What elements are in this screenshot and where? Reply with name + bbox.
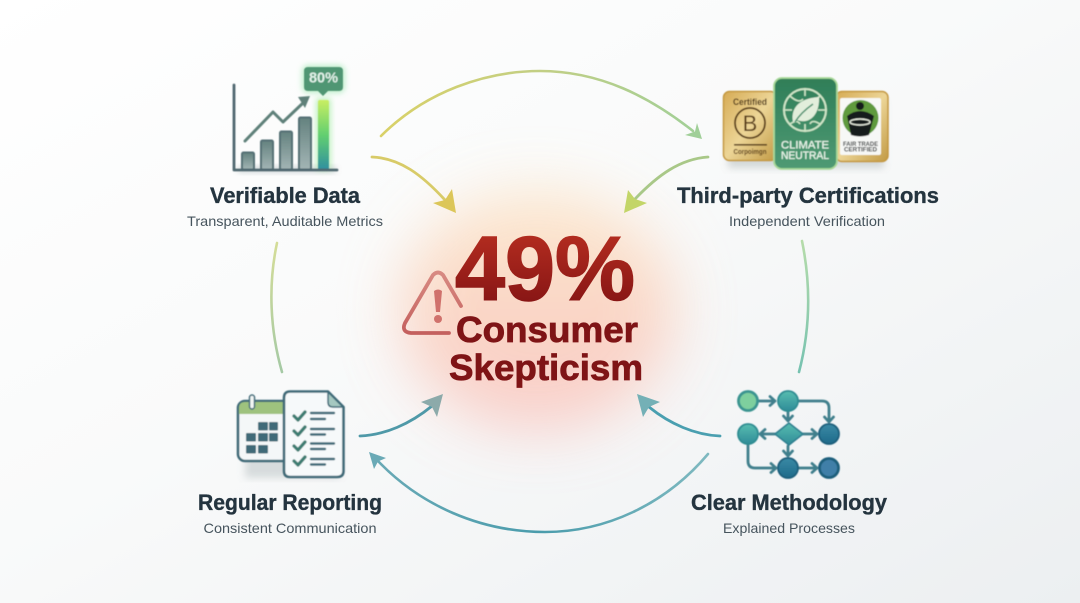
heading: Regular Reporting (198, 490, 382, 515)
icon: process flowchart (738, 391, 839, 478)
arrow: data to center (372, 157, 456, 213)
badge: climate neutral: NEUTRAL (781, 150, 829, 162)
icon: warning triangle (404, 272, 461, 333)
arrow: reporting to center (360, 394, 443, 436)
badge: B Corp: B (743, 111, 757, 136)
heading: Verifiable Data (210, 183, 361, 208)
arrow: methodology to center (637, 394, 720, 436)
panel: clear methodology (691, 391, 888, 536)
central red glow (399, 190, 675, 430)
badge: B Corp (724, 92, 776, 160)
panel: regular reporting (198, 392, 382, 536)
badge: climate neutral (774, 78, 837, 169)
subtext: Explained Processes (723, 520, 855, 536)
calendar (238, 395, 290, 461)
panel: verifiable data (187, 65, 383, 229)
badge: fair trade: FAIR TRADE (843, 141, 879, 148)
subtext: Independent Verification (729, 213, 885, 229)
heading: Third-party Certifications (677, 183, 939, 208)
icon: calendar and checklist (238, 392, 344, 478)
icon: certification badges (724, 78, 888, 169)
big number: 49% (455, 219, 635, 320)
label: Consumer: Consumer (456, 309, 638, 350)
icon: bar chart (234, 65, 345, 173)
badge: fair trade: CERTIFIED (844, 146, 877, 154)
badge: 80%: 80% (309, 70, 338, 86)
cycle arrow: top arc (381, 71, 702, 139)
arrow: certifications to center (624, 157, 708, 213)
cycle arrow: bottom arc (369, 452, 708, 532)
cycle arrow: left arc (271, 243, 282, 372)
cycle arrow: right arc (799, 241, 808, 372)
panel: third-party certifications (677, 78, 939, 229)
heading: Clear Methodology (691, 490, 888, 515)
badge: fair trade (836, 92, 888, 162)
badge: climate neutral: CLIMATE (781, 140, 829, 152)
subtext: Consistent Communication (204, 520, 376, 536)
center stat (404, 219, 643, 388)
badge: B Corp: Corpoimgn (734, 147, 767, 156)
subtext: Transparent, Auditable Metrics (187, 213, 383, 229)
badge: B Corp: Certified (733, 97, 767, 108)
checklist document (284, 392, 344, 477)
label: Skepticism: Skepticism (449, 347, 643, 388)
